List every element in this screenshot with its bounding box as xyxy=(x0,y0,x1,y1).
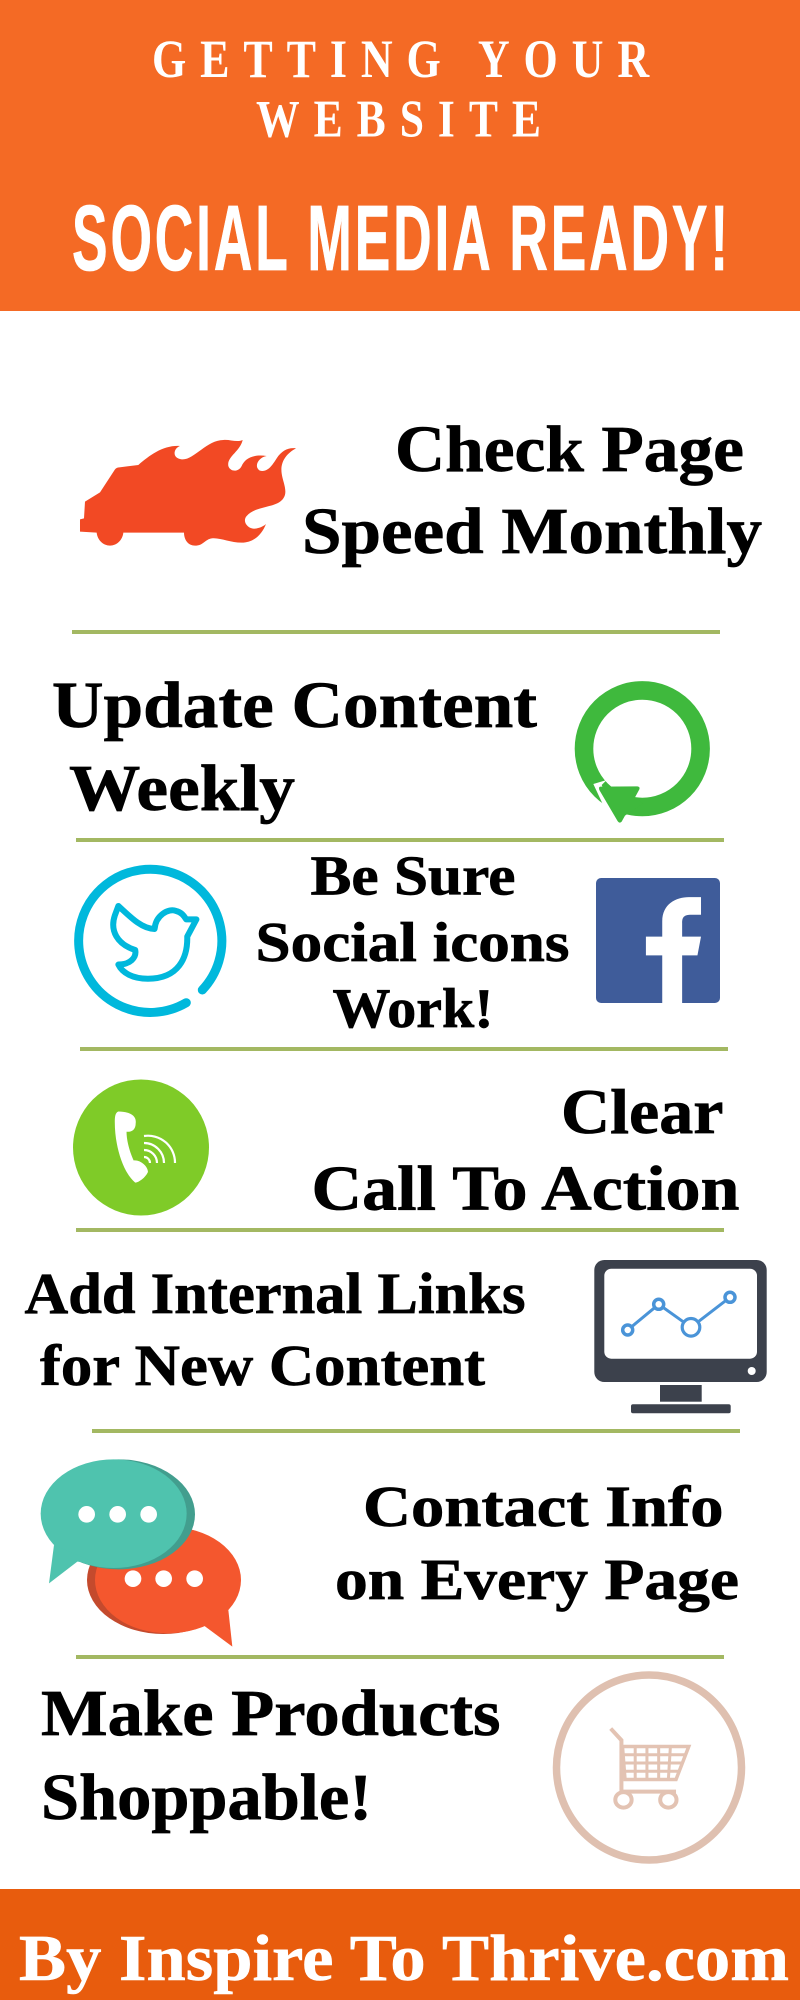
heading: getting your website xyxy=(152,29,663,148)
text: update content weekly: Update Content xyxy=(52,669,537,742)
text: clear call to action: Call To Action xyxy=(312,1152,740,1224)
icon: chat bubbles xyxy=(41,1459,241,1647)
panel: shoppable products xyxy=(41,1675,742,1860)
icon: refresh arrow xyxy=(584,690,701,824)
panel: check page speed xyxy=(80,413,762,568)
text: be sure social icons work xyxy=(256,846,570,1040)
text: check page speed monthly: Speed Monthly xyxy=(302,495,762,568)
panel: footer xyxy=(0,1889,800,2000)
icon: flaming truck xyxy=(80,440,296,546)
text: make products shoppable: Shoppable! xyxy=(41,1761,372,1834)
text: check page speed monthly: Check Page xyxy=(395,413,744,486)
text: make products shoppable: Make Products xyxy=(41,1677,501,1750)
icon: facebook xyxy=(596,878,720,1003)
text: contact info on every page xyxy=(335,1474,739,1612)
panel: update content xyxy=(52,669,701,825)
text: be sure social icons work: Social icons xyxy=(256,912,570,974)
panel: call to action xyxy=(73,1076,740,1224)
icon: monitor with chart xyxy=(594,1260,767,1413)
heading: getting your website: WEBSITE xyxy=(256,90,555,148)
text: clear call to action xyxy=(312,1076,740,1224)
icon: twitter xyxy=(79,869,222,1012)
icon: shopping cart xyxy=(556,1675,742,1860)
text: be sure social icons work: Work! xyxy=(332,978,494,1040)
panel: contact info xyxy=(41,1459,739,1647)
panel: internal links xyxy=(24,1260,767,1413)
text: update content weekly xyxy=(52,669,537,825)
text: add internal links for new content xyxy=(24,1261,526,1398)
text: by inspire to thrive.com: By Inspire To Thrive.com xyxy=(19,1922,789,1995)
text: be sure social icons work: Be Sure xyxy=(310,846,516,908)
panel: header xyxy=(0,0,800,311)
text: update content weekly: Weekly xyxy=(69,752,295,825)
text: contact info on every page: Contact Info xyxy=(363,1474,724,1539)
text: check page speed monthly xyxy=(302,413,762,568)
icon: phone xyxy=(73,1080,209,1216)
text: add internal links for new content: for New Content xyxy=(40,1333,486,1398)
panel: social icons xyxy=(79,846,720,1040)
text: clear call to action: Clear xyxy=(561,1076,724,1147)
text: make products shoppable xyxy=(41,1677,501,1834)
text: add internal links for new content: Add Internal Links xyxy=(24,1261,526,1326)
text: contact info on every page: on Every Page xyxy=(335,1547,739,1612)
heading: getting your website: GETTING YOUR xyxy=(152,29,663,89)
